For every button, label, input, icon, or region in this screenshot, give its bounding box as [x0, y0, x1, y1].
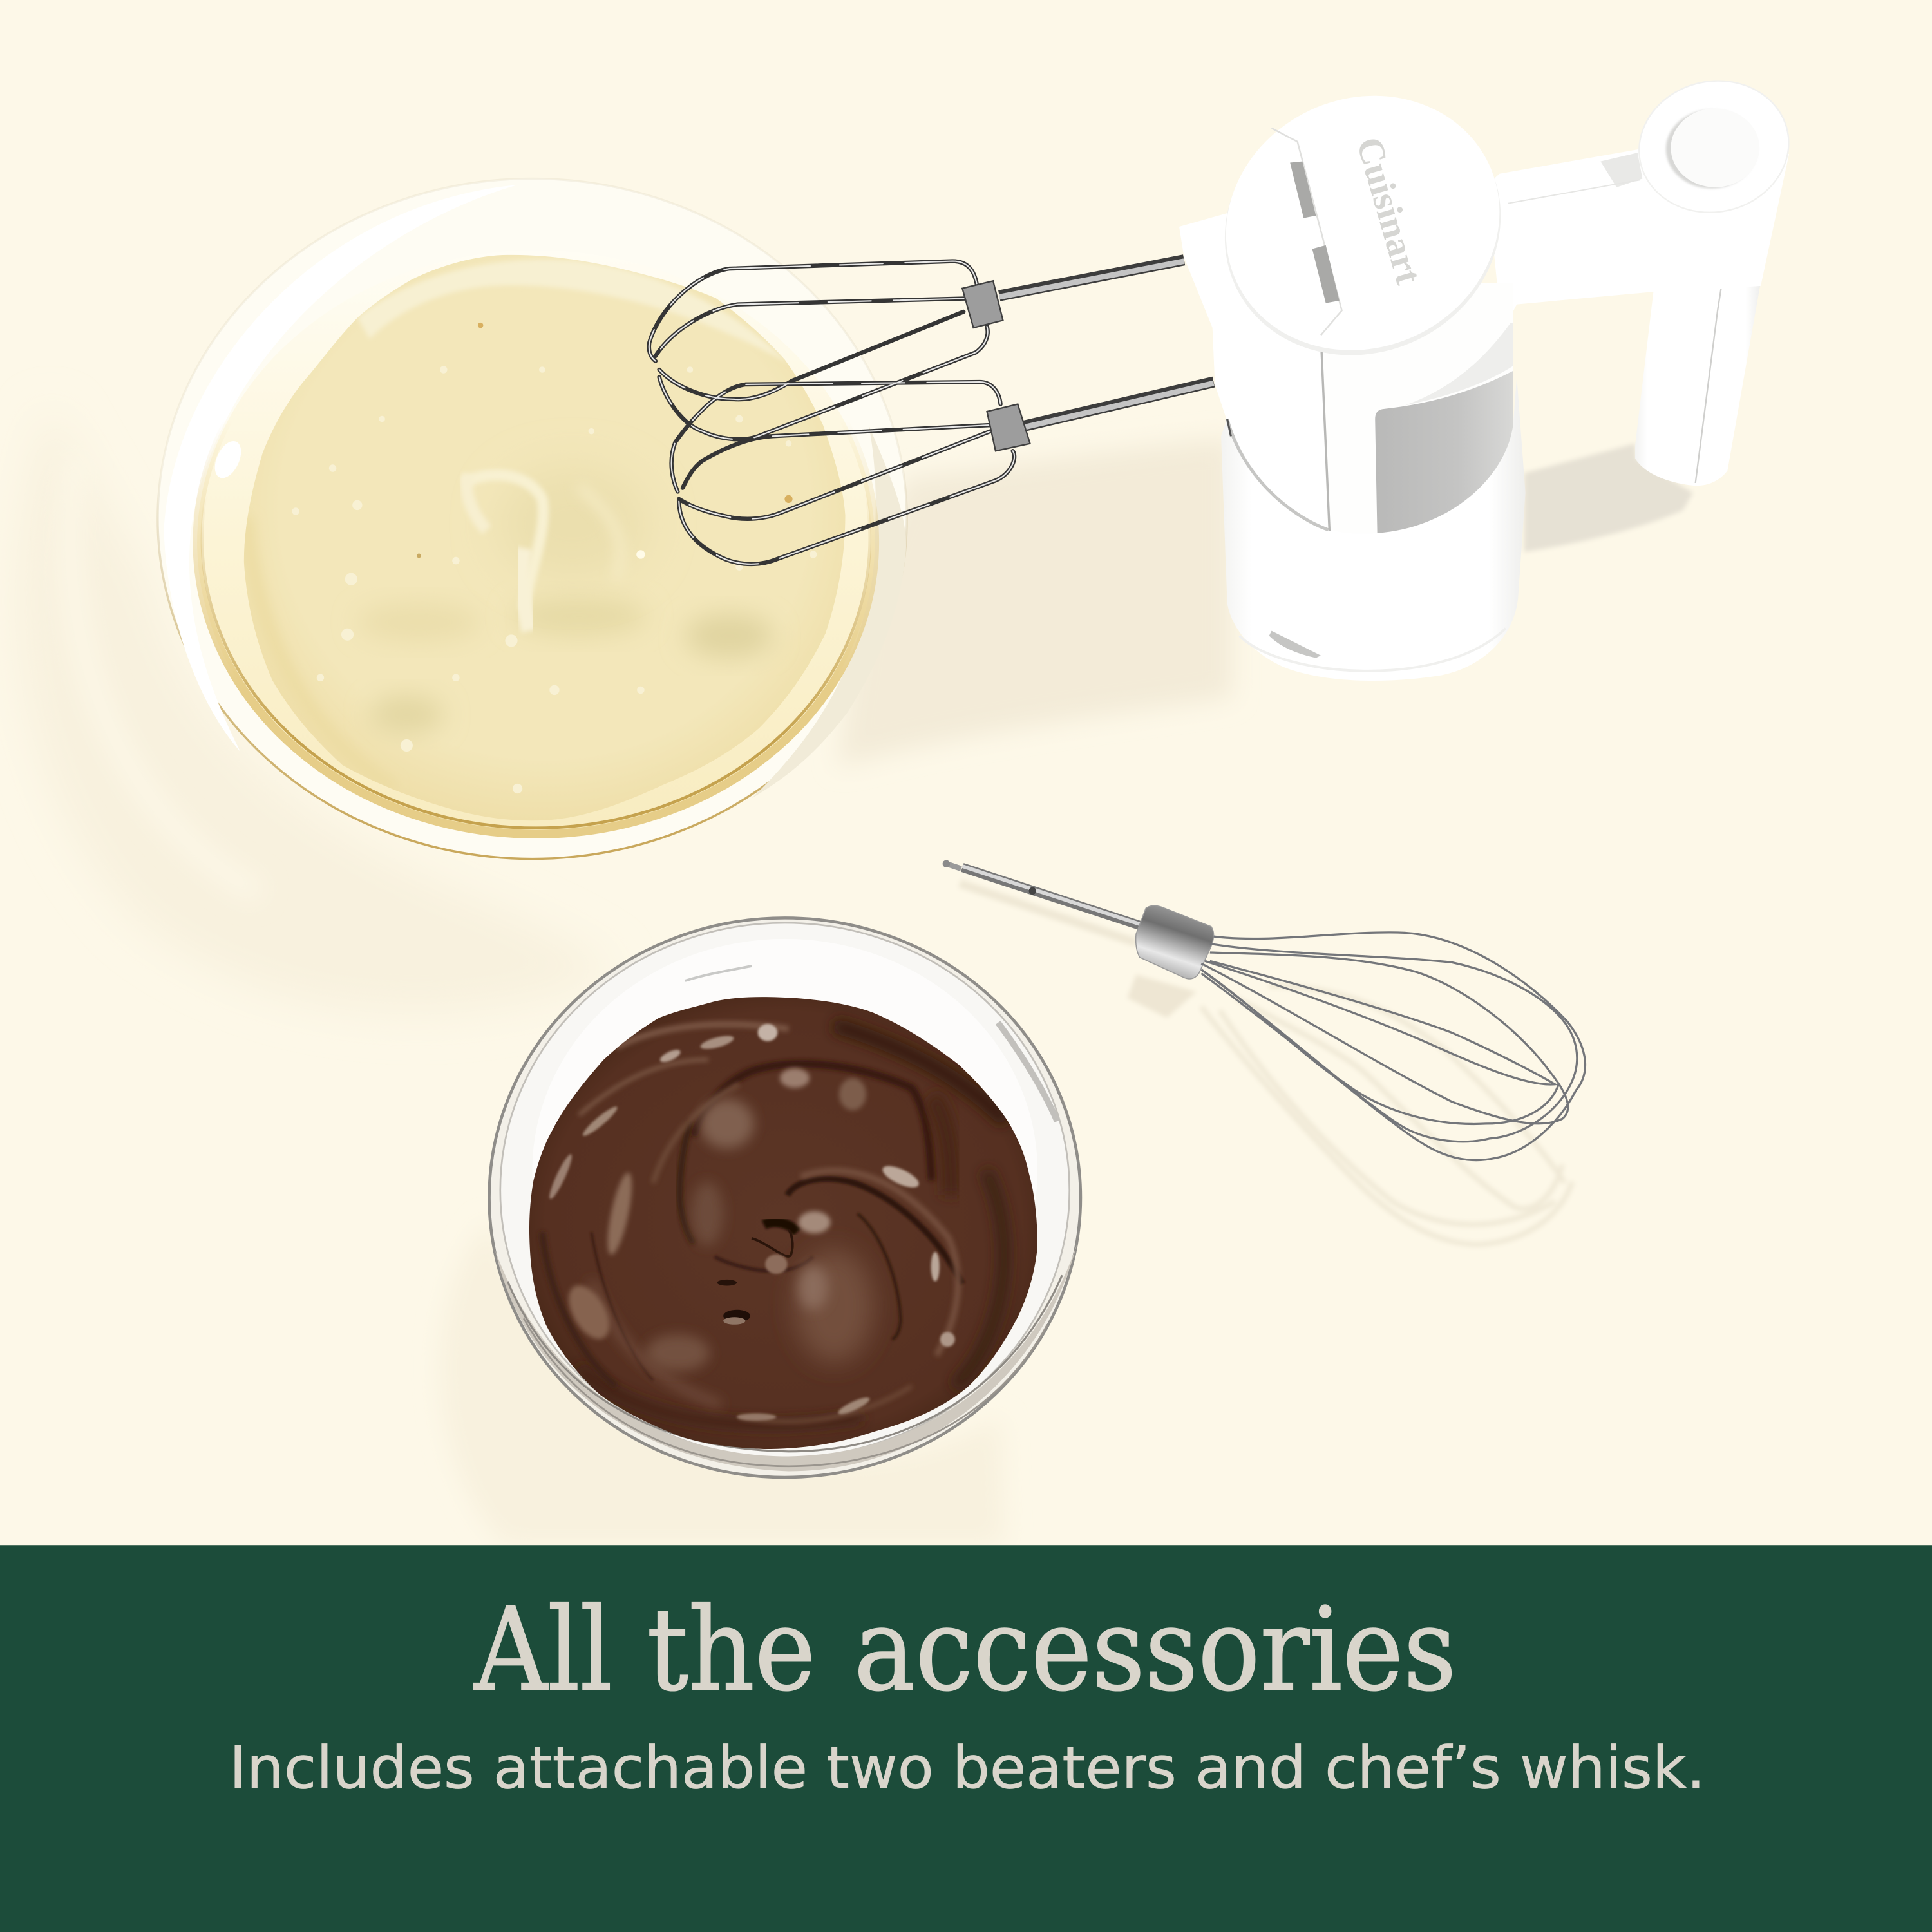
chocolate swirls: [542, 1024, 1005, 1425]
motor body: [1318, 283, 1513, 548]
title: All: [473, 1583, 612, 1716]
chocolate: [529, 997, 1037, 1449]
chocolate bowl: [489, 918, 1081, 1477]
beater wires: [649, 261, 1014, 564]
hand mixer: [1179, 52, 1801, 681]
head slots: [1290, 162, 1340, 303]
golden rim: [197, 250, 875, 834]
air holes: [723, 1310, 750, 1322]
sheen: [700, 1099, 754, 1148]
gray metallic panel: [1375, 371, 1513, 548]
whisk shadow: [1201, 986, 1572, 1244]
beaters: [649, 260, 1214, 564]
soft table shadows: [17, 406, 1693, 1545]
top glass highlight: [164, 185, 518, 752]
whisk ferrule: [1136, 905, 1214, 979]
head disc: [1182, 53, 1543, 400]
base cup: [1221, 377, 1526, 681]
title: the: [647, 1583, 816, 1716]
handle grip: [1635, 282, 1761, 486]
base notch: [1269, 631, 1321, 658]
mixer nose: [1179, 213, 1356, 548]
dark ridges: [834, 1025, 1005, 1121]
batter: [244, 255, 845, 820]
beater shafts: [999, 260, 1214, 428]
batter swirl and shading: [247, 260, 817, 793]
yellow batter bowl: [158, 178, 907, 859]
bowl inner wall: [197, 250, 875, 834]
chef's whisk: [943, 860, 1585, 1244]
glass bottom rims: [495, 1244, 1077, 1471]
button: [1666, 108, 1759, 189]
green banner: [0, 1545, 1932, 1932]
body seam: [1321, 335, 1329, 531]
knob: [1627, 67, 1801, 226]
brand logo: Cuisinart: [1349, 133, 1429, 289]
bowl glass outer: [158, 178, 907, 859]
subtitle: Includes attachable two beaters and chef’s whisk.: [229, 1735, 1705, 1802]
whisk wires: [1201, 933, 1585, 1160]
handle arm: [1487, 149, 1665, 333]
whisk rod: [943, 860, 1144, 927]
chocolate bowl glass: [489, 918, 1081, 1477]
lighter ridges: [616, 1025, 788, 1047]
right glass side: [752, 425, 906, 799]
title: accessories: [854, 1583, 1456, 1716]
beater collars: [962, 281, 1030, 451]
handle collar: [1642, 154, 1789, 293]
